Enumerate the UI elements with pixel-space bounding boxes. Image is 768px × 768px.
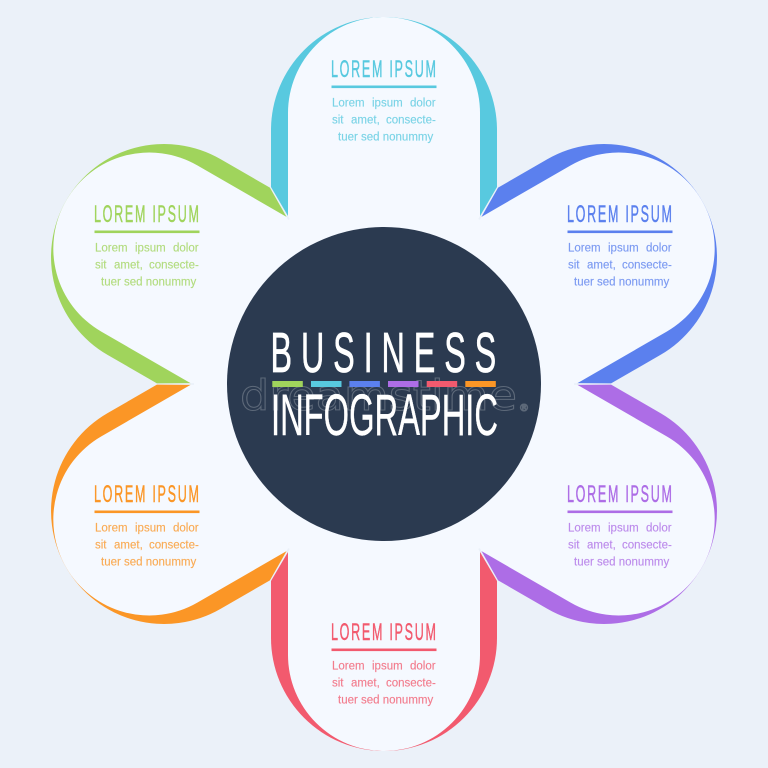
heading: LOREM IPSUM — [94, 482, 199, 508]
body text: ipsum — [135, 522, 166, 534]
heading: LOREM IPSUM — [567, 202, 672, 228]
body text: ipsum — [608, 522, 639, 534]
body text: sit — [332, 114, 344, 126]
ribbon: purple lower-right petal — [473, 370, 758, 665]
title: business: BUSINESS — [270, 320, 496, 384]
heading: LOREM IPSUM — [331, 620, 436, 646]
ribbon: cyan top petal — [271, 17, 497, 216]
body text: amet, — [351, 678, 380, 690]
watermark: dreamstime — [240, 371, 517, 420]
body text: Lorem — [95, 242, 128, 254]
ribbon: blue upper-right petal — [473, 103, 758, 398]
body text: dolor — [173, 522, 199, 534]
colour bars — [272, 381, 496, 387]
central navy circle — [227, 227, 541, 541]
body text: Lorem — [332, 660, 365, 672]
body text: consecte- — [386, 678, 436, 690]
underline — [94, 230, 200, 233]
body text: sit — [568, 260, 580, 272]
ribbon: orange lower-left petal — [10, 370, 295, 665]
body text: Lorem — [568, 242, 601, 254]
panel: cyan text block — [331, 57, 436, 144]
body text: amet, — [587, 540, 616, 552]
panel: red text block — [331, 620, 436, 706]
body text: tuer sed nonummy — [101, 556, 196, 568]
body text: amet, — [587, 260, 616, 272]
body text: Lorem — [332, 98, 365, 110]
body text: consecte- — [149, 260, 199, 272]
body text: sit — [568, 540, 580, 552]
panel: blue text block — [567, 202, 672, 288]
underline — [568, 230, 672, 233]
body text: tuer sed nonummy — [574, 276, 669, 288]
body text: tuer sed nonummy — [101, 276, 196, 288]
underline — [332, 648, 436, 651]
body text: dolor — [410, 660, 436, 672]
body text: amet, — [351, 114, 380, 126]
body text: ipsum — [135, 242, 166, 254]
body text: sit — [95, 260, 107, 272]
body text: dolor — [173, 242, 199, 254]
body text: ipsum — [372, 98, 403, 110]
body text: Lorem — [95, 522, 128, 534]
panel: purple text block — [567, 482, 672, 568]
body text: dolor — [646, 242, 672, 254]
panel: orange text block — [94, 482, 200, 568]
body text: consecte- — [622, 260, 672, 272]
heading: LOREM IPSUM — [94, 202, 199, 228]
body text: dolor — [410, 98, 436, 110]
body text: tuer sed nonummy — [338, 132, 433, 144]
body text: consecte- — [149, 540, 199, 552]
body text: dolor — [646, 522, 672, 534]
underline — [568, 510, 672, 513]
body text: ipsum — [372, 660, 403, 672]
body text: amet, — [114, 260, 143, 272]
underline — [94, 510, 200, 513]
body text: sit — [95, 540, 107, 552]
title: infographic: INFOGRAPHIC — [271, 383, 498, 448]
ribbon: green upper-left petal — [10, 103, 295, 398]
panel: green text block — [94, 202, 200, 288]
body text: amet, — [114, 540, 143, 552]
watermark: ® — [519, 403, 529, 414]
body text: sit — [332, 678, 344, 690]
heading: LOREM IPSUM — [567, 482, 672, 508]
body text: Lorem — [568, 522, 601, 534]
underline — [332, 86, 436, 88]
body text: tuer sed nonummy — [338, 694, 433, 706]
ribbon: red bottom petal — [271, 552, 497, 751]
body text: consecte- — [622, 540, 672, 552]
body text: tuer sed nonummy — [574, 556, 669, 568]
heading: LOREM IPSUM — [331, 57, 436, 83]
body text: ipsum — [608, 242, 639, 254]
body text: consecte- — [386, 114, 436, 126]
